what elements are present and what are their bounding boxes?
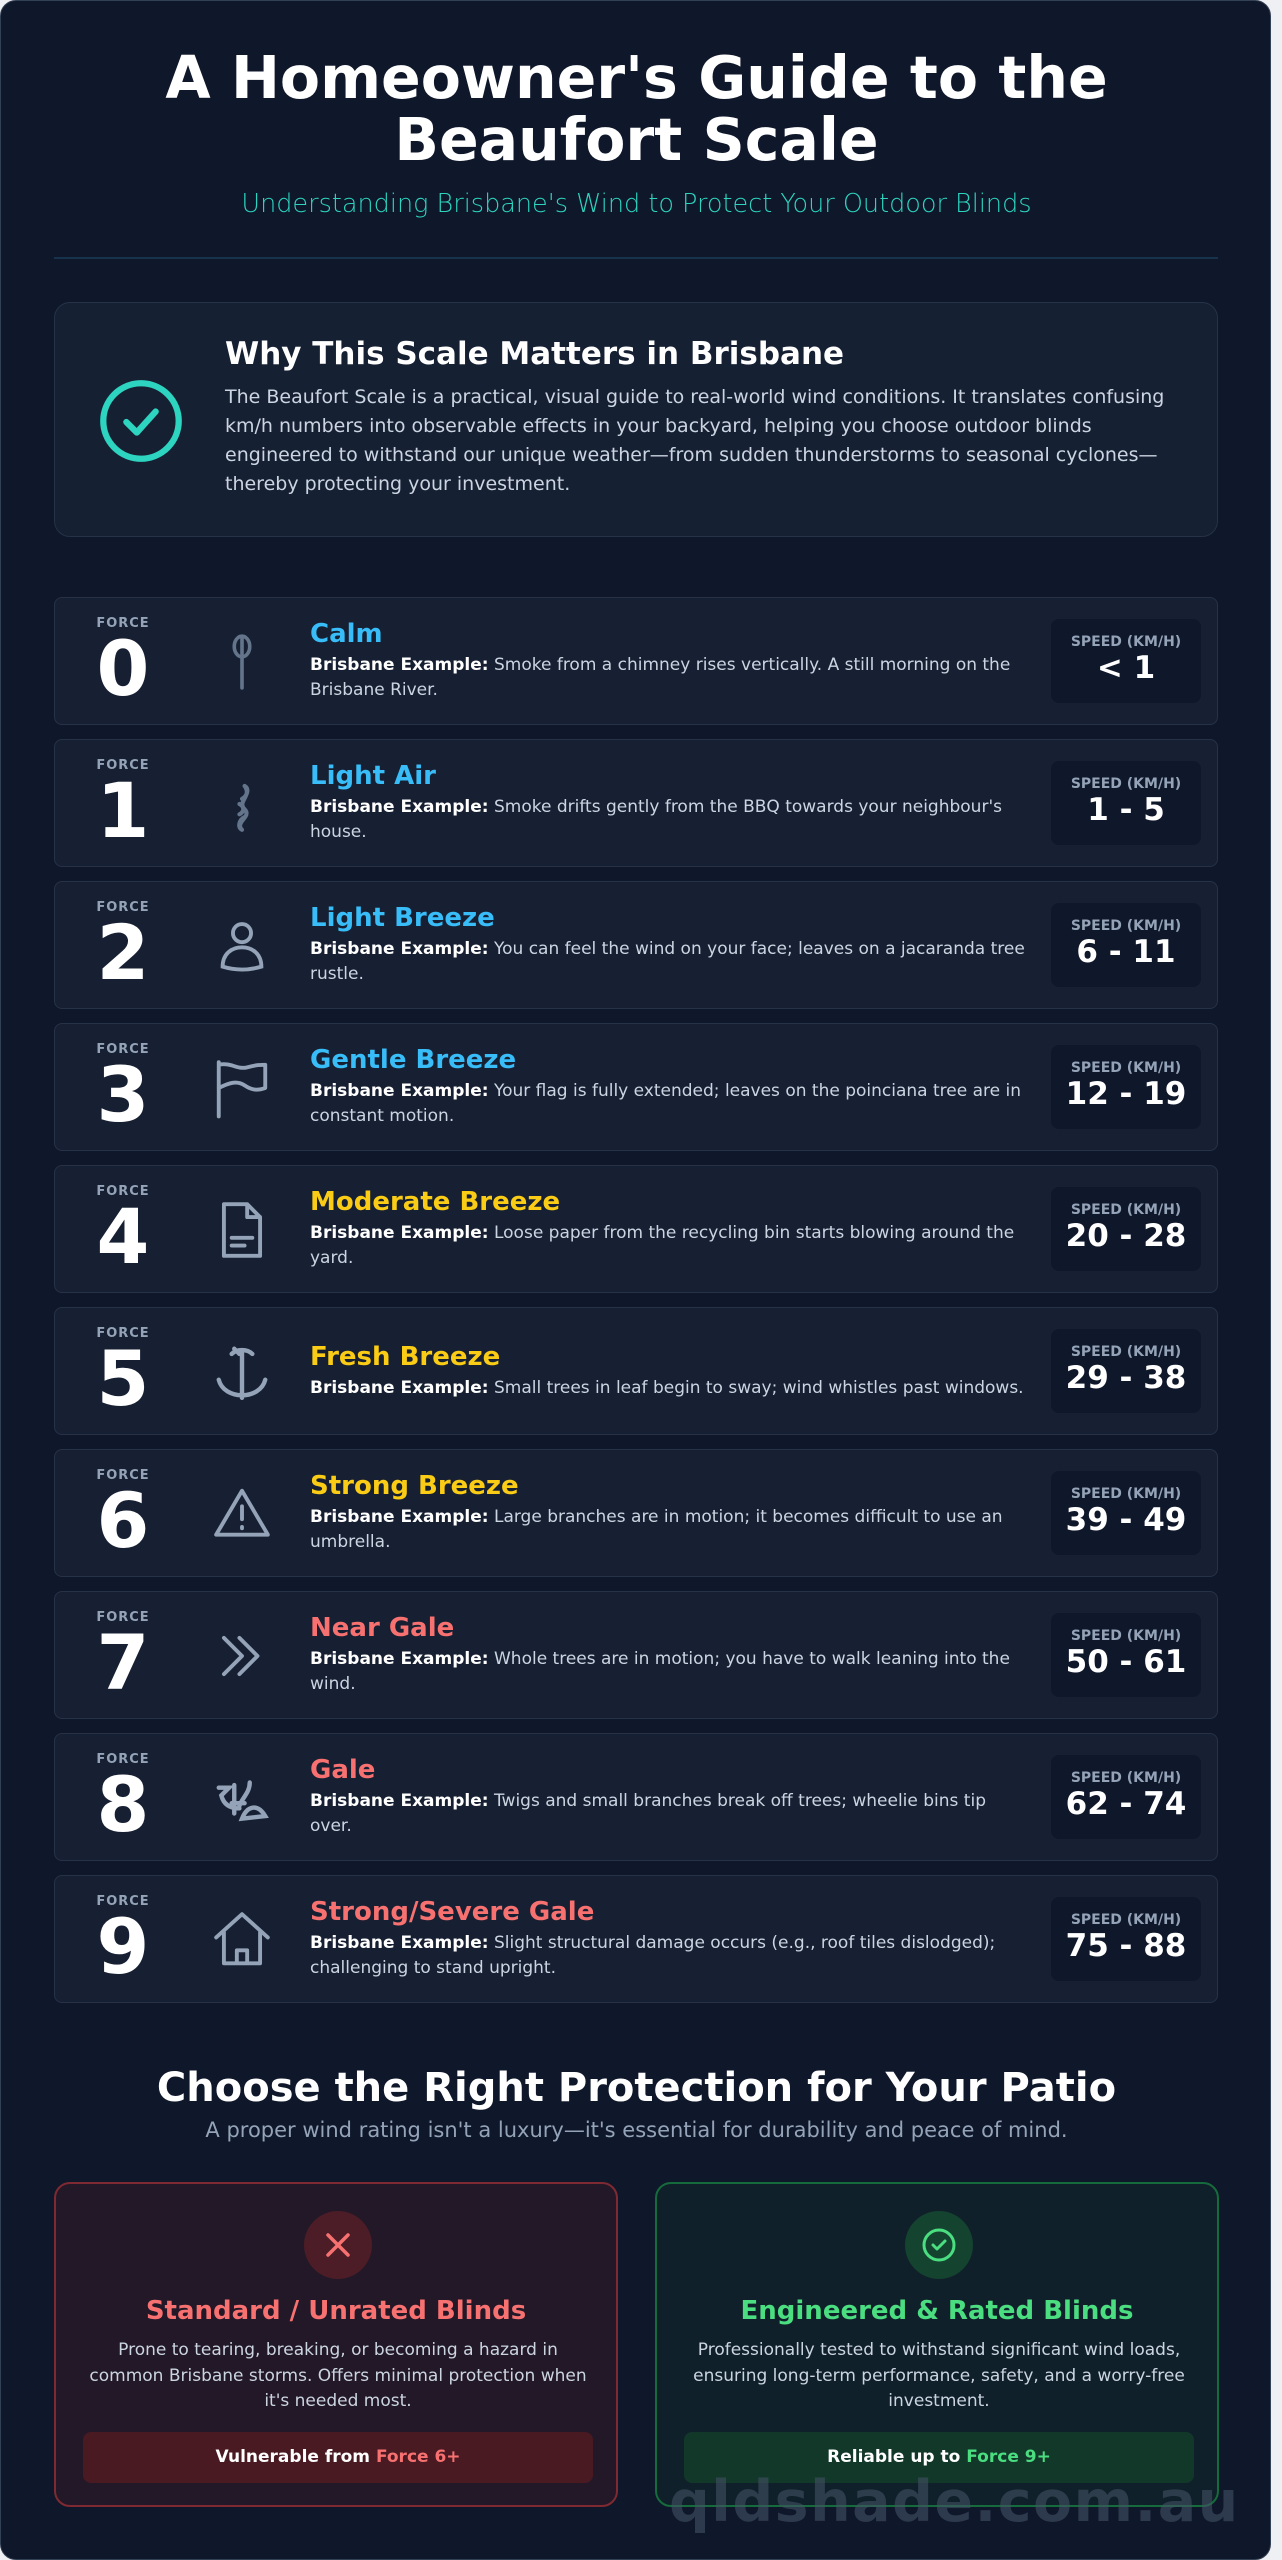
panel: standard blinds [54, 2182, 618, 2507]
title: A Homeowner's Guide to the [165, 44, 1108, 112]
row: force 2: Light Breeze [310, 903, 495, 933]
row: force 2 [54, 881, 1218, 1009]
row: force 9 [54, 1875, 1218, 2003]
row: force 4: 20 - 28 [1066, 1218, 1186, 1254]
row: force 1: Light Air [310, 761, 436, 791]
row: force 7: 50 - 61 [1066, 1644, 1186, 1680]
row: force 3: Brisbane Example: Your flag is fully extended; leaves on the poinciana tree are in constant motion. [310, 1081, 1021, 1126]
row: force 8: Brisbane Example: Twigs and small branches break off trees; wheelie bins tip over. [310, 1791, 986, 1836]
row: force 1: Brisbane Example: Smoke drifts gently from the BBQ towards your neighbour's house. [310, 797, 1002, 842]
icon: flag [216, 1060, 268, 1118]
pill [83, 2432, 593, 2483]
row: force 4: Brisbane Example: Loose paper from the recycling bin starts blowing around the yard. [310, 1223, 1014, 1268]
panel: standard blinds: Prone to tearing, breaking, or becoming a hazard in common Brisbane storms. Offers minimal protection when it's needed most. [89, 2340, 587, 2411]
row: force 6: FORCE [96, 1468, 150, 1483]
row: force 4: FORCE [96, 1184, 150, 1199]
row: force 0: FORCE [96, 616, 150, 631]
section subheading: A proper wind rating isn't a luxury—it's essential for durability and peace of mind. [205, 2118, 1068, 2142]
section heading: Choose the Right Protection for Your Patio [157, 2065, 1116, 2111]
row: force 3 [54, 1023, 1218, 1151]
row: force 0: Calm [310, 619, 383, 649]
row: force 1: 1 [97, 766, 149, 855]
row: force 9: Strong/Severe Gale [310, 1897, 594, 1927]
icon: house [214, 1912, 270, 1966]
row: force 4: 4 [97, 1192, 149, 1281]
row: force 0: 0 [97, 624, 149, 713]
row: force 0: Brisbane Example: Smoke from a chimney rises vertically. A still morning on the Brisbane River. [310, 655, 1010, 700]
row: force 0 [54, 597, 1218, 725]
row: force 0: < 1 [1097, 650, 1155, 686]
watermark: qldshade.com.au [669, 2469, 1240, 2535]
row: force 0: SPEED (KM/H) [1071, 634, 1181, 650]
row: force 3: Gentle Breeze [310, 1045, 516, 1075]
panel: standard blinds: Standard / Unrated Blinds [146, 2296, 526, 2326]
icon: chevrons [222, 1636, 260, 1676]
heading: Why This Scale Matters in Brisbane [225, 336, 844, 372]
panel: engineered blinds: Engineered & Rated Blinds [741, 2296, 1133, 2326]
row: force 5: 5 [97, 1334, 149, 1423]
row: force 5: Fresh Breeze [310, 1342, 500, 1372]
panel: why this scale matters [54, 302, 1218, 537]
row: force 7: Brisbane Example: Whole trees are in motion; you have to walk leaning into the wind. [310, 1649, 1010, 1694]
row: force 6 [54, 1449, 1218, 1577]
row: force 5 [54, 1307, 1218, 1435]
subtitle: Understanding Brisbane's Wind to Protect Your Outdoor Blinds [241, 189, 1032, 219]
row: force 8: 62 - 74 [1066, 1786, 1186, 1822]
row: force 2: Brisbane Example: You can feel the wind on your face; leaves on a jacaranda tree rustle. [310, 939, 1025, 984]
row: force 2: 6 - 11 [1076, 934, 1176, 970]
row: force 7: 7 [97, 1618, 149, 1707]
row: force 6: Strong Breeze [310, 1471, 519, 1501]
row: force 9: Brisbane Example: Slight structural damage occurs (e.g., roof tiles dislodged); challenging to stand upright. [310, 1933, 995, 1978]
panel: engineered blinds [655, 2182, 1219, 2507]
row: force 3: FORCE [96, 1042, 150, 1057]
row: force 1: 1 - 5 [1087, 792, 1165, 828]
row: force 7: FORCE [96, 1610, 150, 1625]
pill: Vulnerable from Force 6+ [215, 2447, 461, 2467]
row: force 4 [54, 1165, 1218, 1293]
row: force 4: Moderate Breeze [310, 1187, 560, 1217]
row: force 7 [54, 1591, 1218, 1719]
row: force 6: Brisbane Example: Large branches are in motion; it becomes difficult to use an umbrella. [310, 1507, 1003, 1552]
row: force 2: FORCE [96, 900, 150, 915]
row: force 6: 39 - 49 [1066, 1502, 1186, 1538]
row: force 8: SPEED (KM/H) [1071, 1770, 1181, 1786]
row: force 7: SPEED (KM/H) [1071, 1628, 1181, 1644]
pill: Reliable up to Force 9+ [827, 2447, 1051, 2467]
row: force 9: FORCE [96, 1894, 150, 1909]
row: force 4: SPEED (KM/H) [1071, 1202, 1181, 1218]
row: force 8: 8 [97, 1760, 149, 1849]
row: force 9: SPEED (KM/H) [1071, 1912, 1181, 1928]
icon: broken branches [216, 1780, 269, 1822]
row: force 3: SPEED (KM/H) [1071, 1060, 1181, 1076]
title: Beaufort Scale [394, 106, 879, 174]
panel: engineered blinds: Professionally tested to withstand significant wind loads, ensuring long-term performance, safety, and a worry-free investment. [693, 2340, 1185, 2411]
row: force 8 [54, 1733, 1218, 1861]
row: force 5: FORCE [96, 1326, 150, 1341]
icon: smoke [237, 784, 250, 832]
row: force 7: Near Gale [310, 1613, 454, 1643]
row: force 6: SPEED (KM/H) [1071, 1486, 1181, 1502]
row: force 2: 2 [97, 908, 149, 997]
title [165, 44, 1108, 174]
pill [684, 2432, 1194, 2483]
icon: warning [214, 1488, 270, 1537]
icon: person [220, 922, 264, 972]
icon: cross [304, 2211, 372, 2279]
row: force 1 [54, 739, 1218, 867]
row: force 5: SPEED (KM/H) [1071, 1344, 1181, 1360]
icon: still [232, 634, 252, 690]
row: force 6: 6 [97, 1476, 149, 1565]
row: force 3: 3 [97, 1050, 149, 1139]
row: force 9: 9 [97, 1902, 149, 1991]
row: force 2: SPEED (KM/H) [1071, 918, 1181, 934]
row: force 1: SPEED (KM/H) [1071, 776, 1181, 792]
row: force 8: Gale [310, 1755, 375, 1785]
icon: check badge [100, 380, 182, 462]
row: force 3: 12 - 19 [1066, 1076, 1186, 1112]
icon: paper [222, 1202, 262, 1258]
row: force 9: 75 - 88 [1066, 1928, 1186, 1964]
row: force 8: FORCE [96, 1752, 150, 1767]
row: force 1: FORCE [96, 758, 150, 773]
icon: swaying tree [216, 1346, 268, 1400]
icon: check [905, 2211, 973, 2279]
body text: The Beaufort Scale is a practical, visual guide to real-world wind conditions. It translates confusing km/h numbers into observable effects in your backyard, helping you choose outdoor blinds engineered to withstand our unique weather—from sudden thunderstorms to seasonal cyclones—thereby protecting your investment. [225, 386, 1164, 495]
row: force 5: Brisbane Example: Small trees in leaf begin to sway; wind whistles past windows. [310, 1378, 1024, 1398]
row: force 5: 29 - 38 [1066, 1360, 1186, 1396]
